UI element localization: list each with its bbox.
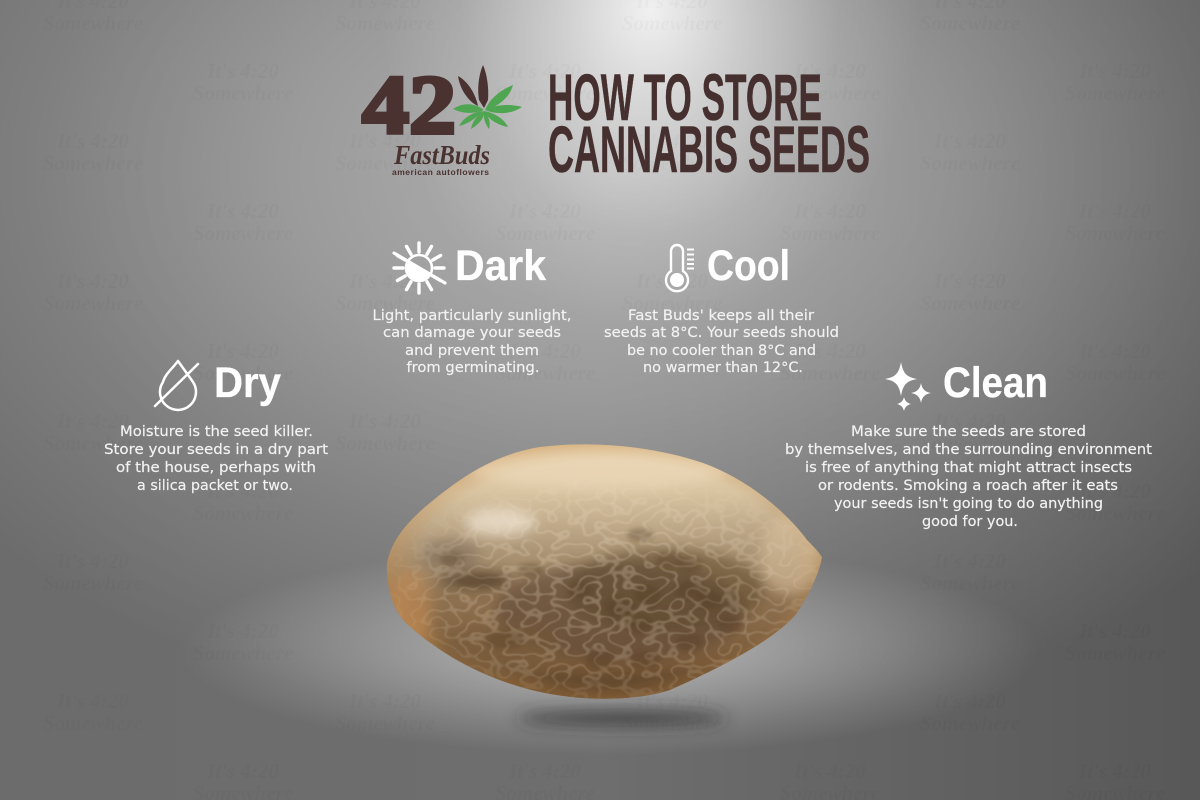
- watermark pattern: It's 4:20: [1078, 59, 1151, 83]
- watermark pattern: Somewhere: [495, 81, 595, 105]
- text: Dry body: Moisture is the seed killer.: [120, 424, 313, 440]
- watermark pattern: Somewhere: [780, 81, 880, 105]
- watermark pattern: It's 4:20: [56, 269, 129, 293]
- watermark pattern: Somewhere: [622, 711, 722, 735]
- text: Clean body: your seeds isn't going to do anything: [834, 496, 1103, 512]
- text: Clean body: is free of anything that might attract insects: [805, 460, 1132, 476]
- watermark pattern: It's 4:20: [1078, 479, 1151, 503]
- logo: Fast Buds 420: [362, 59, 522, 177]
- watermark pattern: Somewhere: [43, 11, 143, 35]
- watermark pattern: It's 4:20: [508, 199, 581, 223]
- watermark pattern: Somewhere: [920, 151, 1020, 175]
- watermark pattern: Somewhere: [335, 711, 435, 735]
- watermark pattern: Somewhere: [43, 291, 143, 315]
- text: Dark body: can damage your seeds: [383, 325, 561, 341]
- icon: crossed-out water drop: [155, 361, 198, 410]
- watermark pattern: It's 4:20: [793, 199, 866, 223]
- seed illustration: [386, 444, 822, 699]
- watermark pattern: Somewhere: [780, 361, 880, 385]
- panel: dry: [104, 359, 328, 494]
- heading: Clean: Clean: [943, 359, 1048, 407]
- watermark pattern: Somewhere: [193, 81, 293, 105]
- text: Clean body: or rodents. Smoking a roach after it eats: [818, 478, 1118, 494]
- watermark pattern: It's 4:20: [56, 129, 129, 153]
- watermark pattern: It's 4:20: [206, 339, 279, 363]
- watermark pattern: Somewhere: [622, 291, 722, 315]
- watermark pattern: It's 4:20: [206, 759, 279, 783]
- text: Cool body: no warmer than 12°C.: [643, 360, 803, 376]
- panel: clean: [785, 359, 1152, 530]
- watermark pattern: Somewhere: [622, 151, 722, 175]
- watermark pattern: It's 4:20: [1078, 759, 1151, 783]
- watermark pattern: Somewhere: [193, 361, 293, 385]
- watermark pattern: Somewhere: [920, 11, 1020, 35]
- watermark pattern: Somewhere: [43, 151, 143, 175]
- watermark pattern: It's 4:20: [206, 619, 279, 643]
- title: CANNABIS SEEDS: [548, 112, 870, 186]
- text: Dry body: a silica packet or two.: [137, 478, 293, 494]
- watermark pattern: It's 4:20: [793, 59, 866, 83]
- seed shadow: [517, 710, 727, 726]
- watermark pattern: It's 4:20: [206, 479, 279, 503]
- watermark pattern: Somewhere: [495, 221, 595, 245]
- watermark pattern: It's 4:20: [206, 59, 279, 83]
- watermark pattern: It's 4:20: [1078, 339, 1151, 363]
- text: Cool body: seeds at 8°C. Your seeds should: [604, 325, 839, 341]
- text: Clean body: good for you.: [922, 514, 1018, 530]
- watermark pattern: It's 4:20: [933, 409, 1006, 433]
- icon: thermometer: [666, 245, 694, 291]
- text: Clean body: by themselves, and the surrounding environment: [785, 442, 1152, 458]
- text: Dark body: and prevent them: [405, 343, 539, 359]
- watermark pattern: Somewhere: [193, 641, 293, 665]
- logo: Fast Buds 420: FastBuds: [393, 140, 490, 170]
- watermark pattern: It's 4:20: [508, 339, 581, 363]
- watermark pattern: It's 4:20: [933, 549, 1006, 573]
- watermark pattern: It's 4:20: [348, 689, 421, 713]
- watermark pattern: Somewhere: [920, 291, 1020, 315]
- watermark pattern: Somewhere: [920, 571, 1020, 595]
- watermark pattern: Somewhere: [193, 221, 293, 245]
- watermark pattern: Somewhere: [335, 291, 435, 315]
- icon: crossed-out sun: [394, 243, 445, 293]
- watermark pattern: Somewhere: [43, 711, 143, 735]
- text: Dry body: [104, 424, 328, 494]
- watermark pattern: It's 4:20: [933, 129, 1006, 153]
- watermark pattern: Somewhere: [495, 361, 595, 385]
- heading: Cool: Cool: [707, 242, 790, 290]
- watermark pattern: Somewhere: [1065, 501, 1165, 525]
- text: Cool body: be no cooler than 8°C and: [627, 343, 816, 359]
- watermark pattern: Somewhere: [1065, 361, 1165, 385]
- watermark pattern: It's 4:20: [56, 549, 129, 573]
- text: Dry body: Store your seeds in a dry part: [104, 442, 328, 458]
- heading: Dry: Dry: [214, 359, 281, 407]
- watermark pattern: It's 4:20: [508, 59, 581, 83]
- heading: Dark: Dark: [455, 242, 546, 290]
- text: Dark body: [372, 308, 572, 376]
- watermark pattern: Somewhere: [622, 11, 722, 35]
- watermark pattern: Somewhere: [43, 431, 143, 455]
- watermark pattern: Somewhere: [1065, 81, 1165, 105]
- watermark pattern: It's 4:20: [348, 409, 421, 433]
- watermark pattern: It's 4:20: [933, 269, 1006, 293]
- text: Clean body: [785, 424, 1152, 530]
- watermark pattern: Somewhere: [920, 711, 1020, 735]
- watermark pattern: It's 4:20: [56, 689, 129, 713]
- text: Cool body: [604, 308, 839, 376]
- logo: Fast Buds 420: 42: [362, 59, 456, 152]
- watermark pattern: Somewhere: [43, 571, 143, 595]
- text: Dark body: Light, particularly sunlight,: [372, 308, 572, 324]
- watermark pattern: Somewhere: [335, 151, 435, 175]
- panel: dark: [372, 242, 572, 376]
- title: HOW TO STORE: [548, 60, 822, 134]
- watermark pattern: Somewhere: [193, 501, 293, 525]
- watermark pattern: Somewhere: [1065, 221, 1165, 245]
- watermark pattern: It's 4:20: [635, 129, 708, 153]
- watermark pattern: It's 4:20: [793, 759, 866, 783]
- watermark pattern: It's 4:20: [635, 689, 708, 713]
- logo: Fast Buds 420: american autoflowers: [392, 167, 489, 177]
- text: Dry body: of the house, perhaps with: [116, 460, 316, 476]
- text: Cool body: Fast Buds' keeps all their: [628, 308, 814, 324]
- watermark pattern: It's 4:20: [348, 269, 421, 293]
- text: Dark body: from germinating.: [406, 360, 540, 376]
- watermark pattern: It's 4:20: [206, 199, 279, 223]
- watermark pattern: Somewhere: [335, 11, 435, 35]
- watermark pattern: Somewhere: [920, 431, 1020, 455]
- watermark pattern: Somewhere: [780, 221, 880, 245]
- title: [548, 60, 870, 186]
- watermark pattern: It's 4:20: [1078, 619, 1151, 643]
- icon: sparkles: [885, 362, 931, 411]
- text: Clean body: Make sure the seeds are stored: [851, 424, 1086, 440]
- watermark pattern: It's 4:20: [348, 129, 421, 153]
- watermark pattern: It's 4:20: [793, 339, 866, 363]
- panel: cool: [604, 242, 839, 376]
- watermark pattern: Somewhere: [1065, 641, 1165, 665]
- watermark pattern: It's 4:20: [1078, 199, 1151, 223]
- watermark pattern: It's 4:20: [508, 759, 581, 783]
- watermark pattern: It's 4:20: [933, 689, 1006, 713]
- watermark pattern: Somewhere: [335, 431, 435, 455]
- watermark pattern: It's 4:20: [56, 409, 129, 433]
- watermark pattern: It's 4:20: [635, 269, 708, 293]
